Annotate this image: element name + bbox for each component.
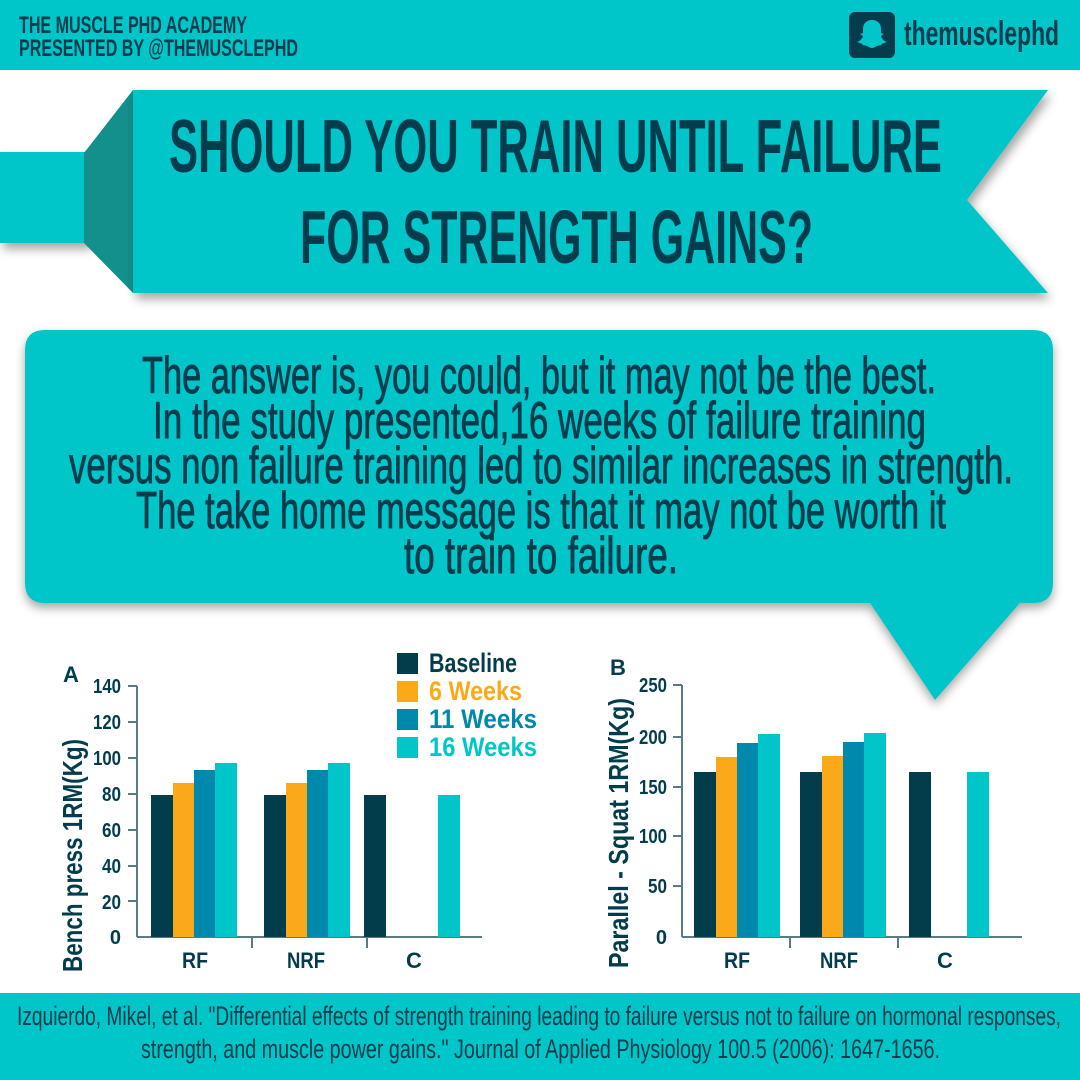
chart A: bench press: 60 [102,820,121,842]
legend: 6 Weeks [429,676,522,706]
icon: snapchat ghost [849,12,895,58]
chart A: bench press: 0 [110,927,121,949]
brand text [19,12,298,62]
snapchat handle [849,12,1059,58]
chart A: bench press: Bench press 1RM(Kg) [57,739,88,972]
chart A: bench press: 100 [93,748,121,770]
chart B: squat: NRF [820,948,858,973]
legend: Baseline [429,648,517,678]
chart A: bench press: RF [182,948,208,973]
legend: 11 Weeks [429,704,537,734]
chart B: squat: 250 [639,675,667,697]
brand text: THE MUSCLE PHD ACADEMY [19,12,247,39]
footer citation [0,993,1080,1080]
chart B: squat: B [610,655,626,680]
chart A: bench press: NRF [287,948,325,973]
chart A: bench press: 20 [102,892,121,914]
title ribbon [0,90,1048,293]
chart A: bench press: 140 [93,676,121,698]
chart B: squat: 150 [639,777,667,799]
chart B: squat: C [937,948,953,973]
title [169,104,942,279]
chart A: bench press: 80 [102,784,121,806]
chart A: bench press [57,662,482,973]
speech bubble [25,330,1053,700]
answer text [69,347,1013,585]
chart B: squat: 100 [639,826,667,848]
chart A: bench press: 40 [102,856,121,878]
legend: 16 Weeks [429,732,537,762]
chart B: squat: 0 [656,927,667,949]
chart B: squat: Parallel - Squat 1RM(Kg) [603,698,634,968]
chart B: squat [603,655,1022,973]
chart A: bench press: C [406,948,422,973]
answer text: to train to failure. [404,527,678,585]
header band [0,0,1080,70]
chart B: squat: 200 [639,727,667,749]
chart B: squat: 50 [648,876,667,898]
legend [397,648,537,762]
chart A: bench press: A [63,662,79,687]
chart B: squat: RF [724,948,750,973]
chart A: bench press: 120 [93,712,121,734]
brand text: PRESENTED BY @THEMUSCLEPHD [19,35,298,62]
